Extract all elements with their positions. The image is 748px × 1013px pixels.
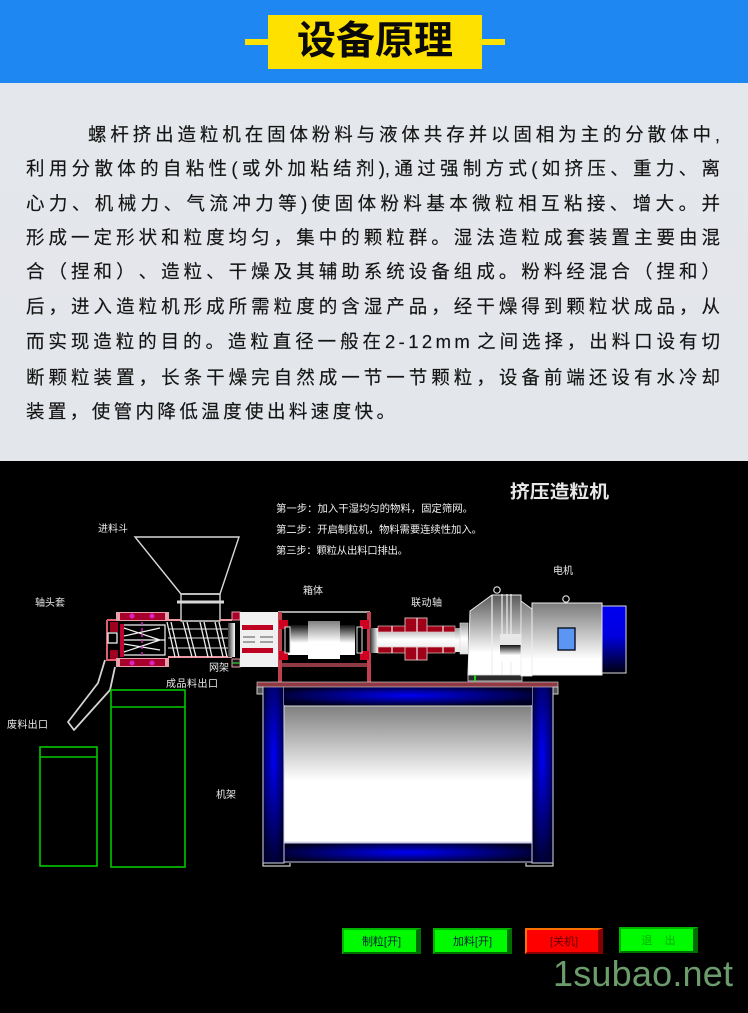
screw barrel — [167, 612, 240, 667]
step 3: 第三步：颗粒从出料口排出。 — [276, 544, 408, 557]
large product bin — [111, 690, 185, 867]
text line 3: 心力、机械力、气流冲力等)使固体粉料基本微粒相互粘接、增大。并 — [26, 193, 720, 214]
header band — [0, 0, 748, 83]
title: 设备原理 — [297, 20, 453, 63]
panel: extruder granulator diagram — [0, 461, 748, 1013]
button: power off: [关机] — [550, 934, 578, 948]
text line 1: 螺杆挤出造粒机在固体粉料与液体共存并以固相为主的分散体中, — [88, 124, 720, 145]
step 1: 第一步：加入干湿均匀的物料，固定筛网。 — [276, 502, 473, 515]
watermark: 1subao.net — [553, 953, 733, 994]
text line 6: 后，进入造粒机形成所需粒度的含湿产品，经干燥得到颗粒状成品，从 — [26, 296, 720, 317]
button: exit — [619, 927, 698, 953]
hopper — [135, 537, 239, 621]
label: product outlet: 成品料出口 — [166, 677, 218, 690]
small waste bin — [40, 747, 97, 866]
label: box body: 箱体 — [303, 584, 323, 597]
waste chute — [68, 660, 115, 730]
motor — [532, 596, 626, 675]
button: granulator on: 制粒[开] — [362, 934, 401, 948]
button: granulator on — [342, 928, 421, 954]
part labels — [7, 522, 573, 801]
button: power off — [525, 928, 603, 954]
gearbox — [468, 587, 532, 681]
steps — [276, 502, 482, 557]
label: motor: 电机 — [553, 564, 573, 577]
label: waste outlet: 废料出口 — [7, 718, 48, 731]
text line 2: 利用分散体的自粘性(或外加粘结剂),通过强制方式(如挤压、重力、离 — [26, 158, 720, 179]
label: head sleeve: 轴头套 — [35, 596, 65, 609]
button: feed on — [433, 928, 512, 954]
step 2: 第二步：开启制粒机，物料需要连续性加入。 — [276, 523, 482, 536]
text line 5: 合（捏和）、造粒、干燥及其辅助系统设备组成。粉料经混合（捏和） — [26, 261, 720, 282]
box body — [278, 612, 378, 682]
machine frame — [257, 682, 558, 866]
label: mesh frame: 网架 — [209, 662, 229, 674]
button: exit: 退 出 — [641, 933, 676, 947]
text line 9: 装置，使管内降低温度使出料速度快。 — [26, 401, 395, 422]
text line 4: 形成一定形状和粒度均匀，集中的颗粒群。湿法造粒成套装置主要由混 — [26, 227, 720, 248]
title — [245, 15, 505, 69]
label: feed hopper: 进料斗 — [98, 522, 128, 535]
panel: description text — [0, 83, 748, 461]
coupling shaft — [378, 618, 468, 660]
text line 8: 断颗粒装置，长条干燥完自然成一节一节颗粒，设备前端还设有水冷却 — [26, 367, 720, 388]
button: feed on: 加料[开] — [453, 934, 492, 948]
label: frame: 机架 — [216, 788, 236, 801]
text line 7: 而实现造粒的目的。造粒直径一般在2-12mm之间选择，出料口设有切 — [26, 331, 720, 352]
bearing housing — [240, 612, 278, 667]
label: coupling shaft: 联动轴 — [411, 596, 442, 609]
chart title: 挤压造粒机 — [510, 481, 609, 502]
extruder head — [107, 612, 169, 667]
